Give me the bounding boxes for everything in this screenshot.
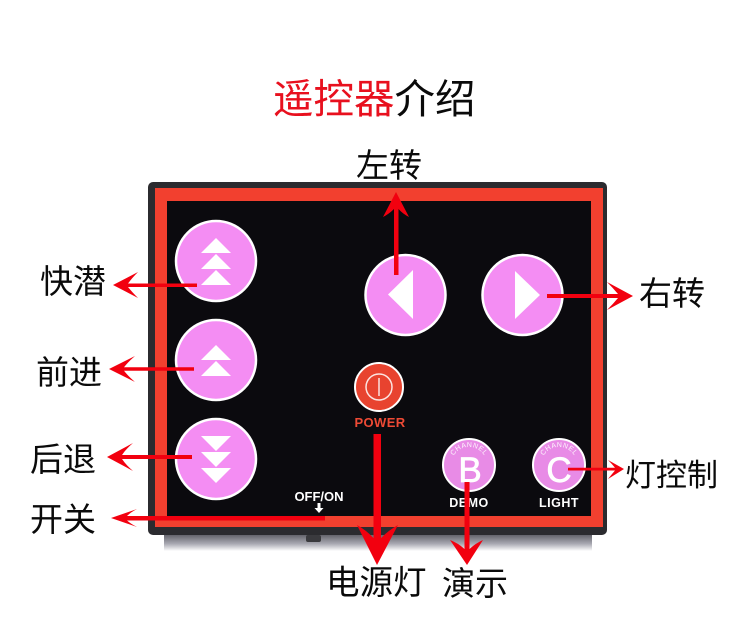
button: fast dive [176,221,256,301]
red frame [155,188,603,527]
off/on label: OFF/ON [294,489,344,504]
button: turn left [366,255,446,335]
button: channel B [442,438,496,492]
label: fast dive: 快潜 [40,263,106,300]
button: channel C [532,438,586,492]
bottom switch notch [306,535,321,542]
arrow: demo [450,482,483,565]
label: power light: 电源灯 [326,565,426,602]
light label: LIGHT [539,496,579,510]
device body [148,182,607,535]
label: turn left: 左转 [356,147,422,184]
button: channel C: C [546,451,572,490]
arrow: light control [568,460,624,479]
black panel [167,201,591,516]
button: channel B: B [458,451,482,490]
demo label: DEMO [449,496,489,510]
device shadow [164,533,592,551]
label: turn right: 右转 [639,275,705,312]
power label: POWER [354,415,406,430]
label: backward: 后退 [30,441,96,478]
label: light control: 灯控制 [625,458,718,493]
label: demo: 演示 [442,565,508,602]
arrow: forward [109,356,194,382]
button: forward [176,320,256,400]
button: channel C: CHANNEL [540,442,576,456]
arrow: turn left [383,192,409,275]
button: channel B: CHANNEL [450,442,486,456]
label: forward: 前进 [36,354,102,391]
label: on/off switch: 开关 [30,501,96,538]
remote control device [148,182,607,550]
button: turn right [482,255,562,335]
arrow: fast dive [113,272,197,298]
off/on down arrow [314,503,324,513]
arrow: on/off switch [111,509,325,527]
title: 遥控器介绍 [273,76,476,122]
button: power [355,363,403,411]
arrow: backward [107,443,192,471]
button: backward [176,419,256,499]
arrow: power light [357,434,398,565]
arrow: turn right [547,282,633,310]
